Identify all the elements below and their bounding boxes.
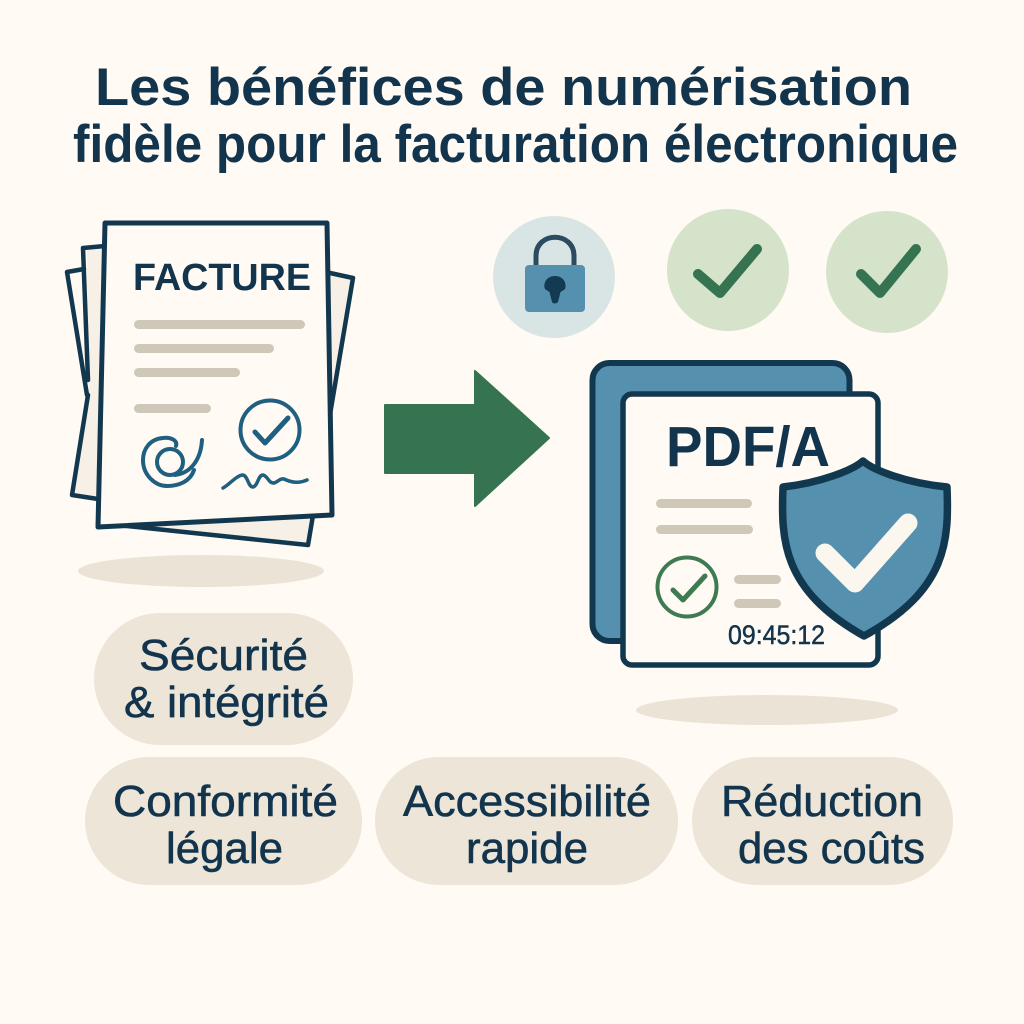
pill: Accessibilité rapide: Accessibilité [403,777,651,826]
pill: Conformité légale [85,757,362,885]
pill: Réduction des coûts: Réduction [721,777,923,826]
title [73,58,958,174]
PDF/A front sheet [623,394,878,665]
pill: Sécurité & intégrité: & intégrité [124,678,329,727]
icon: validation check [658,558,716,616]
pill: Réduction des coûts: des coûts [738,824,925,873]
icon: check badge 2 [826,211,948,333]
pill: Conformité légale: légale [166,824,283,873]
pill: Réduction des coûts [692,757,953,885]
icon: paper invoice stack [67,223,353,545]
invoice text lines [134,320,305,413]
invoice front sheet [98,223,332,527]
heading: FACTURE: FACTURE [133,257,311,299]
title: Les bénéfices de numérisation [95,58,912,117]
pill: Sécurité & intégrité: Sécurité [139,631,308,680]
icon: stamp swirl [143,438,202,486]
pill: Accessibilité rapide [375,757,678,885]
timestamp: 09:45:12 [728,620,825,650]
heading: PDF/A: PDF/A [666,415,830,479]
icon: security shield [783,461,947,636]
icon: padlock badge [493,216,615,338]
icon: check badge 1 [667,209,789,331]
shadow under invoice [78,555,324,587]
icon: approval seal [240,400,300,460]
document text lines [656,499,781,608]
icon: handwritten signature [223,475,307,488]
pill: Accessibilité rapide: rapide [466,824,588,873]
title: fidèle pour la facturation électronique [73,115,958,174]
shadow under PDF [636,695,898,725]
arrow [385,371,549,506]
icon: PDF/A document [592,363,878,665]
pill: Sécurité & intégrité [94,613,353,745]
pill: Conformité légale: Conformité [113,777,338,826]
